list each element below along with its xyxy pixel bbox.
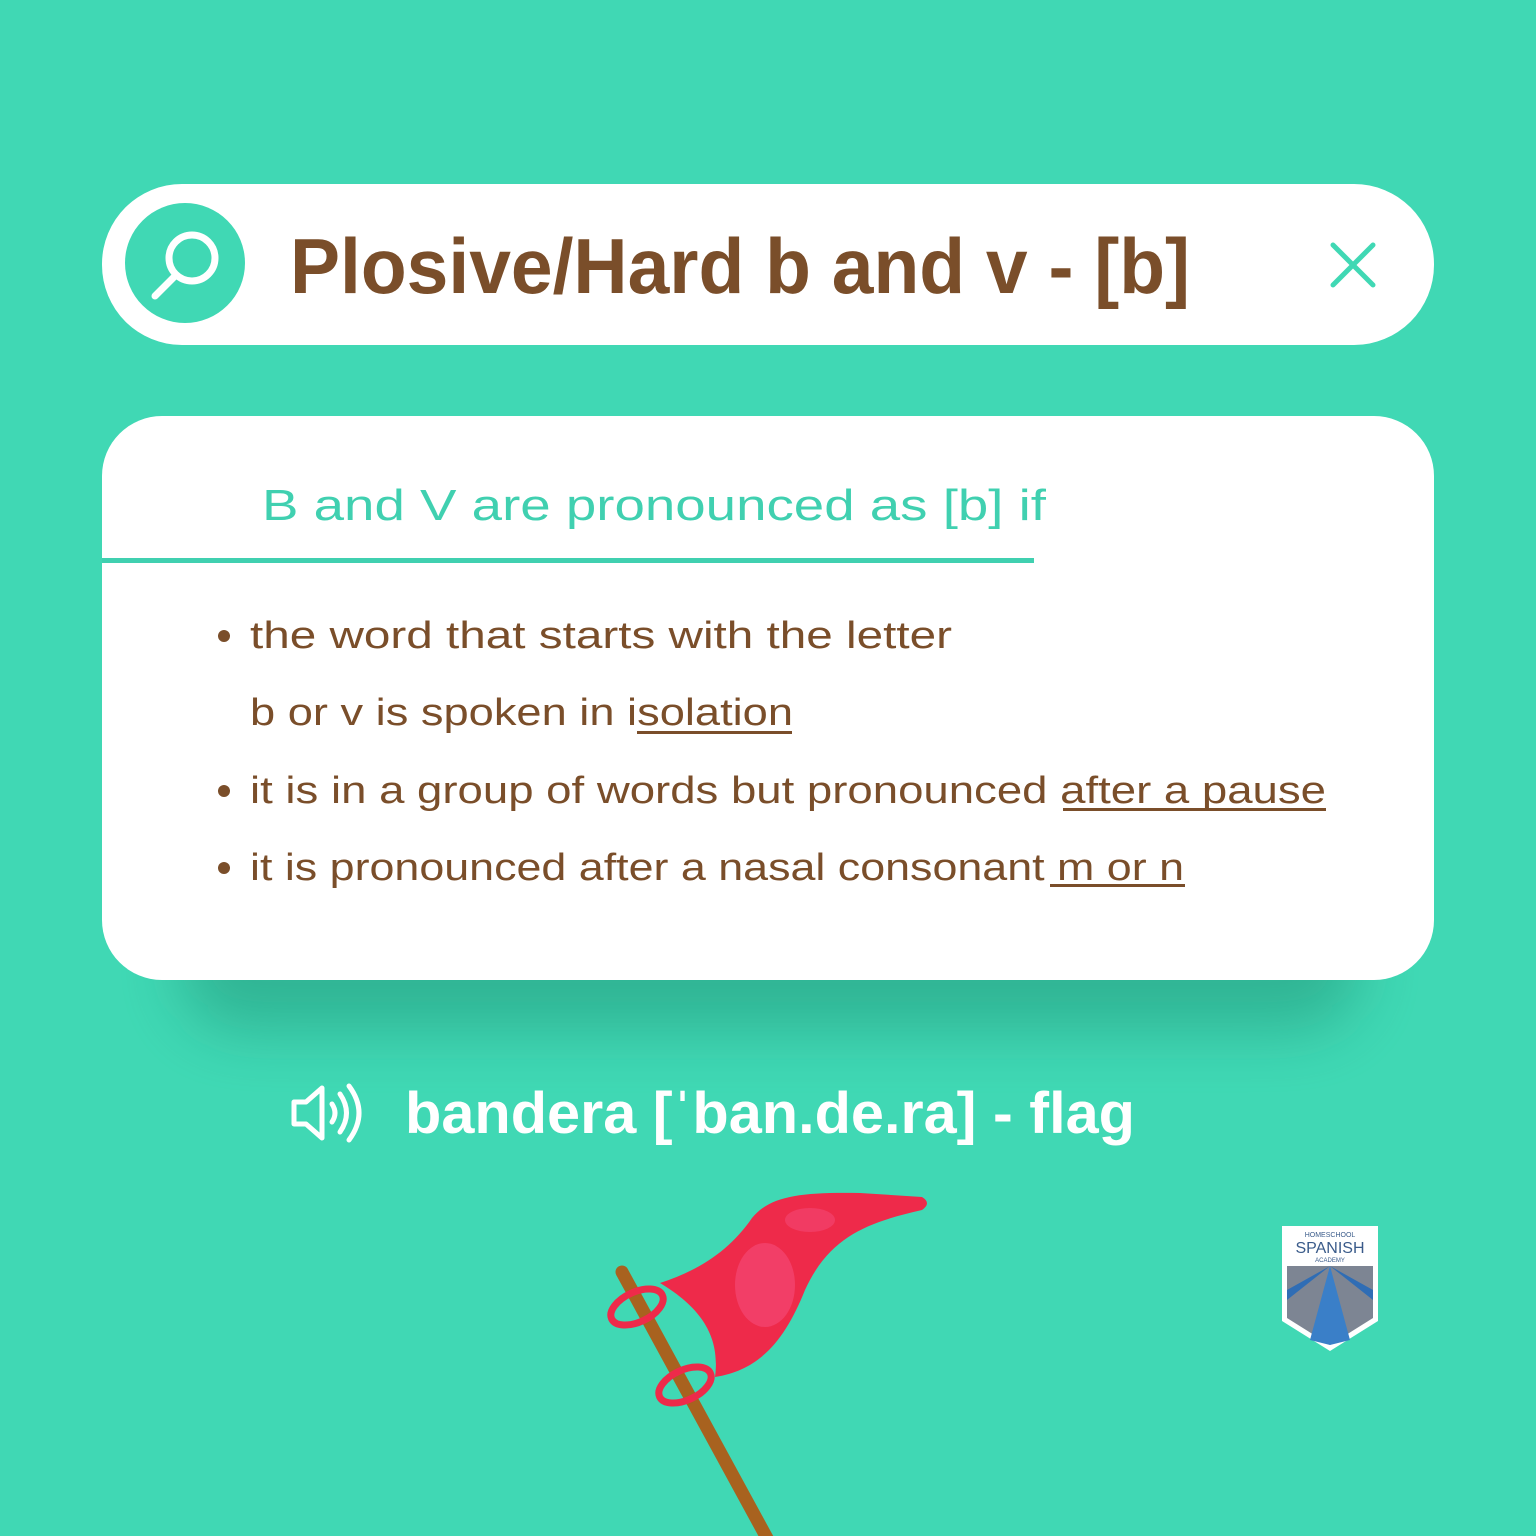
logo: SPANISH (1295, 1240, 1365, 1257)
example word: bandera [ˈban.de.ra] - flag (405, 1081, 1135, 1146)
logo (1282, 1226, 1378, 1351)
card heading: B and V are pronounced as [b] if (262, 481, 1047, 530)
bullet list: the word that starts with the letter (250, 615, 952, 657)
logo: ACADEMY (1315, 1258, 1345, 1264)
icon: search (125, 203, 245, 323)
bullet list: it is pronounced after a nasal consonant m or n (250, 847, 1184, 889)
bullet list: it is in a group of words but pronounced after a pause (250, 770, 1326, 812)
illustration: flag (605, 1193, 927, 1536)
panel: rules card (102, 416, 1434, 980)
icon: speaker (294, 1086, 359, 1140)
bullet list (218, 615, 1326, 889)
bullet list: b or v is spoken in isolation (250, 692, 793, 734)
logo: HOMESCHOOL (1305, 1232, 1355, 1239)
search bar (102, 184, 1434, 345)
card shadow (180, 900, 1360, 1030)
icon: close (1333, 245, 1373, 285)
title: Plosive/Hard b and v - [b] (290, 222, 1190, 310)
